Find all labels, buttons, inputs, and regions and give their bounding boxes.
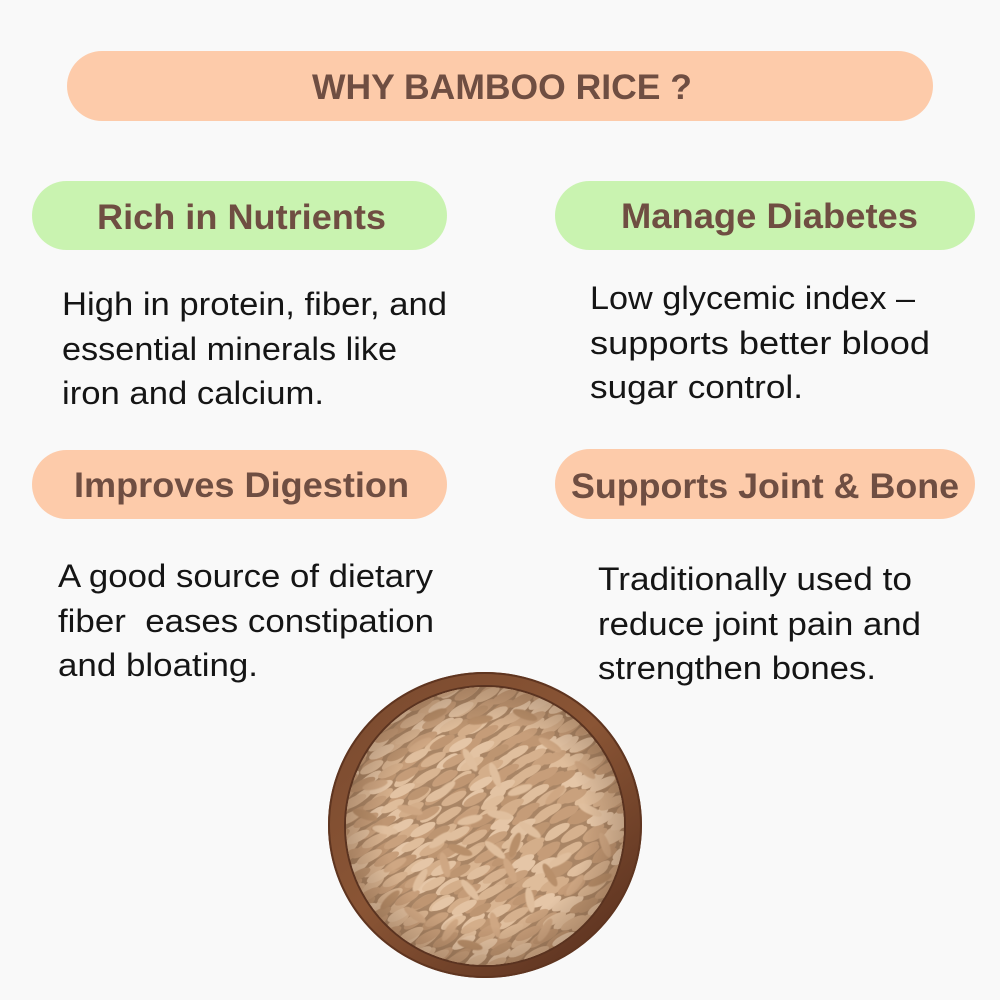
- text block: supports joint and bone: strengthen bones.: [598, 650, 876, 686]
- text block: improves digestion: and bloating.: [58, 647, 258, 683]
- heading: supports joint and bone: Supports Joint & Bone: [571, 467, 959, 506]
- heading: rich in nutrients: [32, 181, 447, 250]
- text block: supports joint and bone: reduce joint pain and: [598, 606, 921, 642]
- icon: wooden bowl of bamboo rice: [328, 672, 642, 978]
- text block: manage diabetes: [590, 280, 930, 405]
- text block: rich in nutrients: High in protein, fiber, and: [62, 286, 447, 322]
- panel: manage diabetes: [555, 181, 975, 405]
- heading: rich in nutrients: Rich in Nutrients: [97, 198, 386, 237]
- heading: improves digestion: Improves Digestion: [74, 466, 409, 505]
- heading: manage diabetes: Manage Diabetes: [621, 197, 918, 236]
- text block: manage diabetes: Low glycemic index –: [590, 280, 915, 316]
- text block: supports joint and bone: [598, 561, 921, 686]
- text block: supports joint and bone: Traditionally used to: [598, 561, 912, 597]
- panel: supports joint and bone: [555, 449, 975, 686]
- panel: improves digestion: [32, 450, 447, 683]
- text block: manage diabetes: sugar control.: [590, 369, 803, 405]
- title: WHY BAMBOO RICE ?: [312, 68, 692, 107]
- text block: rich in nutrients: [62, 286, 447, 411]
- title: [67, 51, 933, 121]
- panel: rich in nutrients: [32, 181, 447, 411]
- text block: rich in nutrients: essential minerals like: [62, 331, 397, 367]
- heading: manage diabetes: [555, 181, 975, 250]
- text block: improves digestion: [58, 558, 434, 683]
- text block: improves digestion: fiber eases constipation: [58, 603, 434, 639]
- heading: improves digestion: [32, 450, 447, 519]
- text block: manage diabetes: supports better blood: [590, 325, 930, 361]
- text block: improves digestion: A good source of dietary: [58, 558, 433, 594]
- heading: supports joint and bone: [555, 449, 975, 519]
- text block: rich in nutrients: iron and calcium.: [62, 375, 324, 411]
